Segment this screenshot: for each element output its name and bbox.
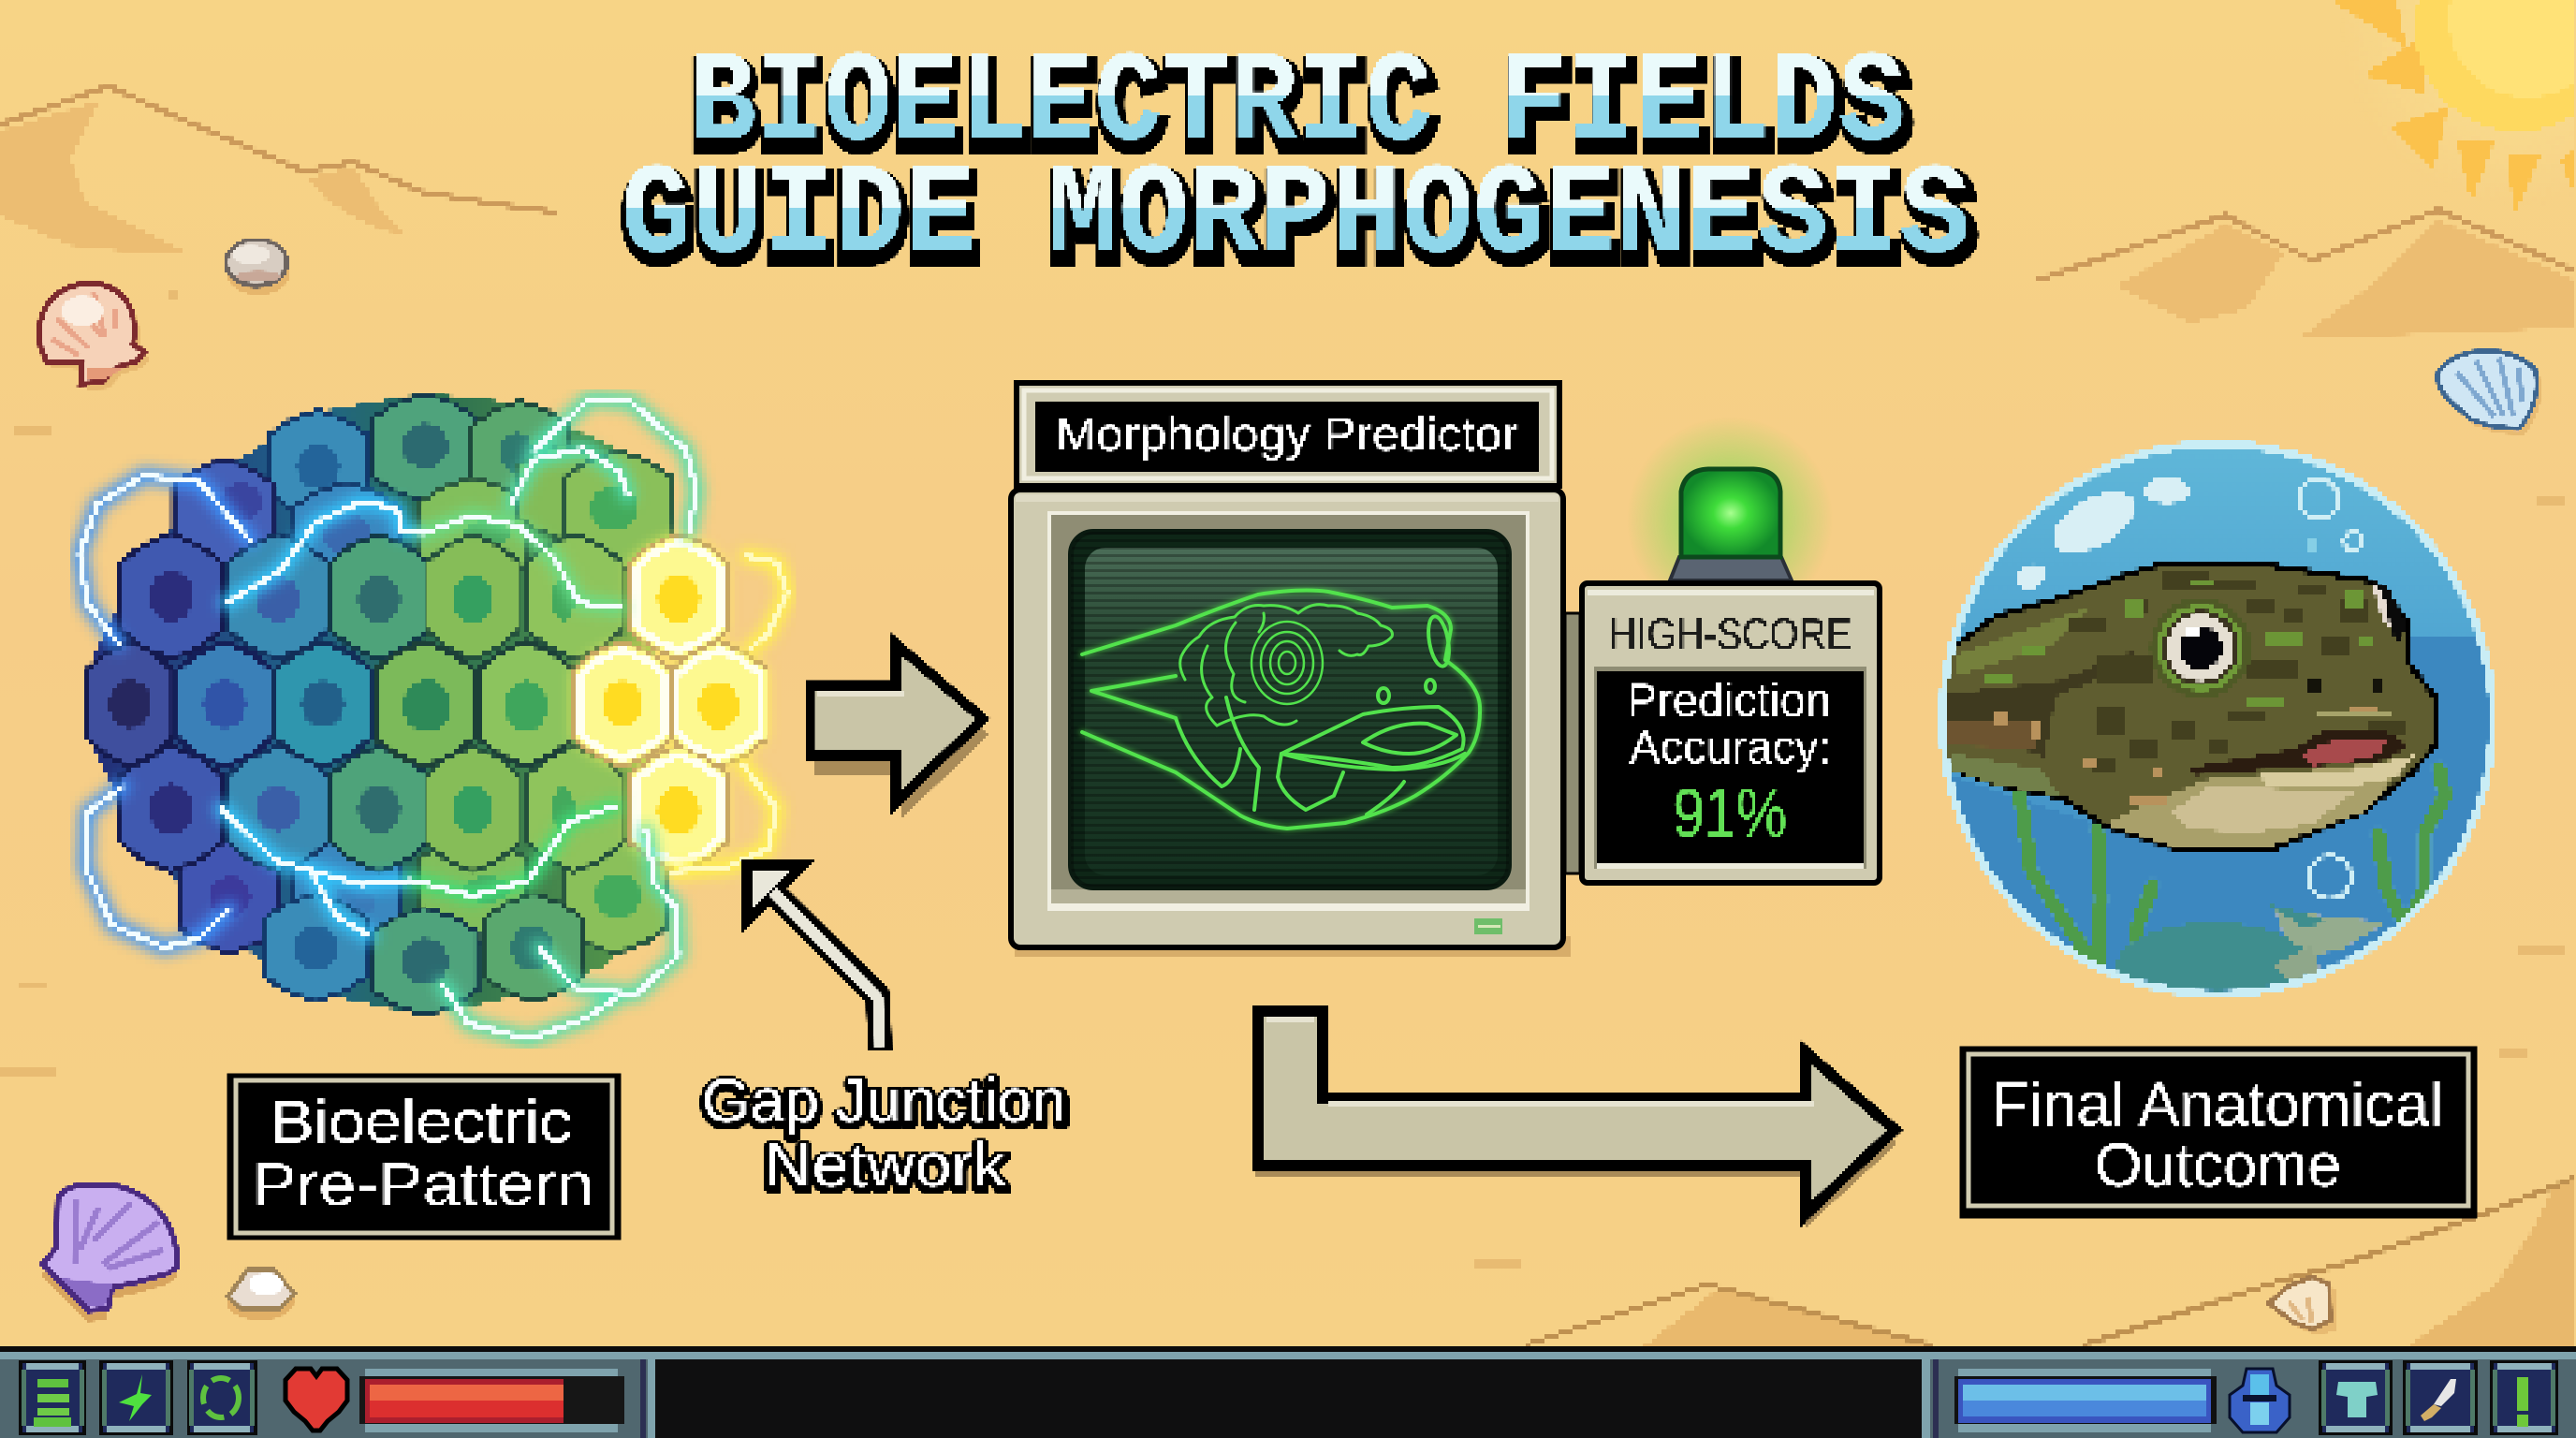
cells: glowing yellow (574, 534, 768, 872)
icon: menu button (19, 1360, 86, 1435)
arrow: gap junction pointer (747, 865, 880, 1050)
water (1946, 448, 2489, 990)
title: line one shadow: BIOELECTRIC FIELDS (691, 40, 1911, 186)
label text: Network (765, 1130, 1007, 1199)
far eye (2373, 580, 2406, 646)
lower water band (1952, 637, 2490, 992)
dune: top right shading (2117, 220, 2576, 339)
beacon base (1670, 557, 1792, 580)
cells: row below centre (121, 746, 622, 872)
belly (2105, 756, 2412, 847)
score screen (1594, 667, 1866, 869)
monitor shadow (1015, 936, 1571, 957)
label outline: Network (765, 1133, 1007, 1202)
label: final anatomical outcome (1962, 1049, 2475, 1216)
dune: bottom right (2406, 1178, 2576, 1348)
title plate text: Morphology Predictor (1056, 408, 1518, 461)
frog body (1928, 563, 2435, 851)
nostrils (1378, 688, 1389, 703)
title (621, 32, 1976, 299)
cells: row above centre (121, 534, 622, 659)
accuracy value: 91% (1673, 774, 1787, 852)
bubble rim (1939, 440, 2496, 998)
label text: pre-pattern: Pre-Pattern (252, 1151, 593, 1218)
pebble: lower left (227, 1269, 294, 1320)
screen (1071, 532, 1509, 888)
shell: pink scallop (39, 284, 150, 390)
bioelectric hexagon cell cluster (80, 393, 787, 1039)
title: line two: GUIDE MORPHOGENESIS (621, 144, 1970, 290)
tail dark bands (1928, 651, 2132, 757)
title: line one: BIOELECTRIC FIELDS (689, 32, 1906, 178)
label: gap junction network (702, 1065, 1068, 1202)
frog outline (1082, 591, 1480, 829)
icon: heart (285, 1369, 347, 1431)
health bar (359, 1369, 624, 1432)
monitor body (1011, 490, 1563, 947)
icon: sun (2331, 0, 2576, 215)
dune: bottom middle (1642, 1289, 1931, 1348)
seaweed (2020, 768, 2445, 992)
icon: sword button (2403, 1360, 2478, 1435)
rocks on the seabed (2115, 903, 2382, 992)
wireframe eye (1251, 622, 1323, 704)
label text: Gap Junction (702, 1065, 1066, 1135)
shell: cream lower right (2269, 1277, 2337, 1335)
icon: alert button (2490, 1360, 2558, 1435)
icon: armour button (2319, 1360, 2393, 1435)
panel: high-score (1582, 583, 1880, 883)
label text: bioelectric: Bioelectric (271, 1088, 572, 1155)
HUD centre panel (655, 1359, 1922, 1438)
heading: high-score: HIGH-SCORE (1609, 609, 1852, 658)
label outline: Gap Junction (702, 1068, 1068, 1137)
cells: centre row (87, 641, 574, 767)
title: line two shadow: GUIDE MORPHOGENESIS (622, 153, 1976, 299)
label text: final anatomical: Final Anatomical (1991, 1069, 2443, 1138)
icon: cycle button (187, 1360, 257, 1435)
cells: outer rows (173, 393, 672, 1016)
icon: green beacon (1627, 417, 1833, 623)
frog wireframe on screen (1082, 591, 1480, 829)
pebble: upper left (224, 238, 290, 295)
frog eye (2150, 597, 2251, 698)
icon: potion (2230, 1369, 2290, 1432)
cluster backing (94, 393, 655, 1016)
lower jaw (1278, 772, 1343, 810)
mana bar (1954, 1369, 2217, 1432)
arrow: cells to predictor (811, 644, 988, 818)
shell: purple scallop (41, 1184, 178, 1322)
monitor LED (1474, 918, 1502, 934)
mouth (2190, 712, 2408, 775)
shell: blue white (2437, 351, 2541, 435)
connector: monitor to score panel (1565, 613, 1580, 873)
prediction label: Prediction (1627, 674, 1831, 726)
back fin on head (1425, 615, 1453, 668)
water highlights (2043, 479, 2144, 565)
skin blotches (2069, 571, 2406, 772)
bioelectric arcs: glow (80, 399, 787, 1039)
shells and pebbles (39, 238, 2541, 1335)
label outline (702, 1068, 1068, 1202)
panel: final frog in bubble (1928, 440, 2509, 1016)
bioelectric arcs: white core (80, 399, 787, 1039)
bottom HUD (0, 1346, 2576, 1438)
nostrils (2308, 680, 2321, 693)
arrow: predictor to outcome (1256, 1011, 1897, 1226)
panel: morphology predictor monitor (1011, 383, 1571, 957)
dune: top left shading (0, 101, 404, 251)
mouth and lips (1281, 707, 1464, 768)
tail fin (1091, 676, 1176, 718)
bubbles (2299, 479, 2363, 899)
title plate (1017, 383, 1559, 486)
HUD base (0, 1346, 2576, 1438)
brain lobes (1180, 605, 1393, 726)
label: bioelectric pre-pattern (229, 1076, 619, 1238)
icon: bolt button (99, 1360, 173, 1435)
sand specks (0, 290, 2565, 1267)
label text (702, 1065, 1066, 1199)
label text: outcome: Outcome (2095, 1130, 2341, 1199)
beacon dome (1681, 469, 1780, 557)
accuracy label: Accuracy: (1630, 721, 1831, 773)
